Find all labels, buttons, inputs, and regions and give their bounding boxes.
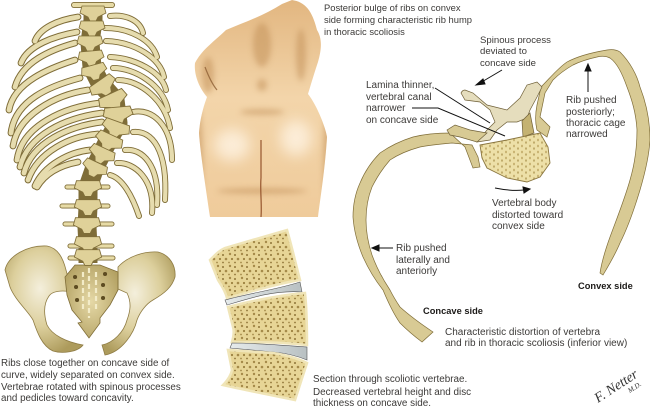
sacrum and coccyx [65, 265, 118, 338]
rib and vertebra, inferior view [353, 50, 650, 342]
caption: rib hump: side forming characteristic rib hump [324, 14, 472, 25]
torso shading [199, 22, 327, 196]
highlights [214, 120, 312, 161]
section through vertebrae [210, 230, 307, 400]
label: rib pushed posteriorly: posteriorly; [566, 107, 615, 118]
caption: distortion: and rib in thoracic scoliosis (inferior view) [445, 338, 627, 349]
disc upper [225, 282, 302, 305]
label: vertebral body: convex side [492, 221, 545, 232]
signature: M.D. [626, 380, 643, 395]
spinous process and lamina [461, 82, 542, 142]
left ribs, concave side [9, 17, 102, 187]
label: rib pushed laterally: anteriorly [396, 266, 437, 277]
label: lamina: vertebral canal [366, 92, 432, 103]
caption: section: Section through scoliotic vertebrae. [313, 374, 467, 385]
label: rib pushed posteriorly: Rib pushed [566, 95, 617, 106]
label: vertebral body: Vertebral body [492, 198, 556, 209]
leader: canal [412, 108, 505, 136]
left rib, concave side [353, 133, 480, 342]
caption: ribs: curve, widely separated on convex side. [1, 370, 175, 381]
pedicle, convex side [522, 113, 534, 137]
label: spinous process: concave side [480, 58, 536, 69]
caption: ribs: Vertebrae rotated with spinous processes [1, 382, 181, 393]
vertebra bottom [223, 350, 307, 400]
lumbar transverse processes [62, 187, 113, 258]
arrow: rib pushed posteriorly [585, 64, 591, 92]
pelvis [5, 246, 175, 355]
label: rib pushed laterally: laterally and [396, 255, 450, 266]
label: lamina: on concave side [366, 115, 439, 126]
right rib, convex side [536, 50, 650, 275]
label: rib pushed posteriorly: narrowed [566, 129, 608, 140]
arrows and leader lines [372, 64, 591, 251]
armpit crease [205, 67, 217, 90]
label: lamina: Lamina thinner, [366, 80, 434, 91]
vertebra top [210, 230, 300, 298]
label: lamina: narrower [366, 103, 406, 114]
arrow: spinous process [476, 70, 502, 85]
right ribs, convex side [105, 16, 172, 216]
label: rib pushed posteriorly: thoracic cage [566, 118, 626, 129]
transverse process, concave side [447, 125, 487, 142]
gluteal cleft [260, 140, 262, 217]
label: rib pushed laterally: Rib pushed [396, 243, 447, 254]
torso showing rib hump [194, 0, 327, 217]
caption: distortion: Characteristic distortion of vertebra [445, 327, 601, 338]
vertebrae stack [73, 6, 134, 265]
caption: ribs: and pedicles toward concavity. [1, 393, 134, 404]
disc lower [230, 343, 307, 360]
arrow: vertebral body rotation [495, 187, 530, 193]
arrow: rib pushed laterally [372, 245, 393, 251]
label: convex side: Convex side [578, 281, 633, 291]
label: spinous process: Spinous process [480, 35, 551, 46]
caption: rib hump: in thoracic scoliosis [324, 26, 405, 37]
label: vertebral body: distorted toward [492, 210, 563, 221]
label: concave side: Concave side [423, 306, 483, 316]
leader: lamina [435, 88, 490, 123]
caption: ribs: Ribs close together on concave side of [1, 358, 170, 369]
caption: rib hump: Posterior bulge of ribs on convex [324, 2, 461, 13]
caption: section: Decreased vertebral height and disc [313, 387, 471, 398]
signature: F. Netter [591, 367, 642, 407]
vertebral body [480, 133, 550, 182]
vertebra middle [228, 293, 307, 345]
label: spinous process: deviated to [480, 46, 527, 57]
caption: section: thickness on concave side. [313, 398, 431, 409]
spine column [62, 5, 134, 265]
skeleton: scoliotic spine, rib cage and pelvis [5, 5, 175, 355]
